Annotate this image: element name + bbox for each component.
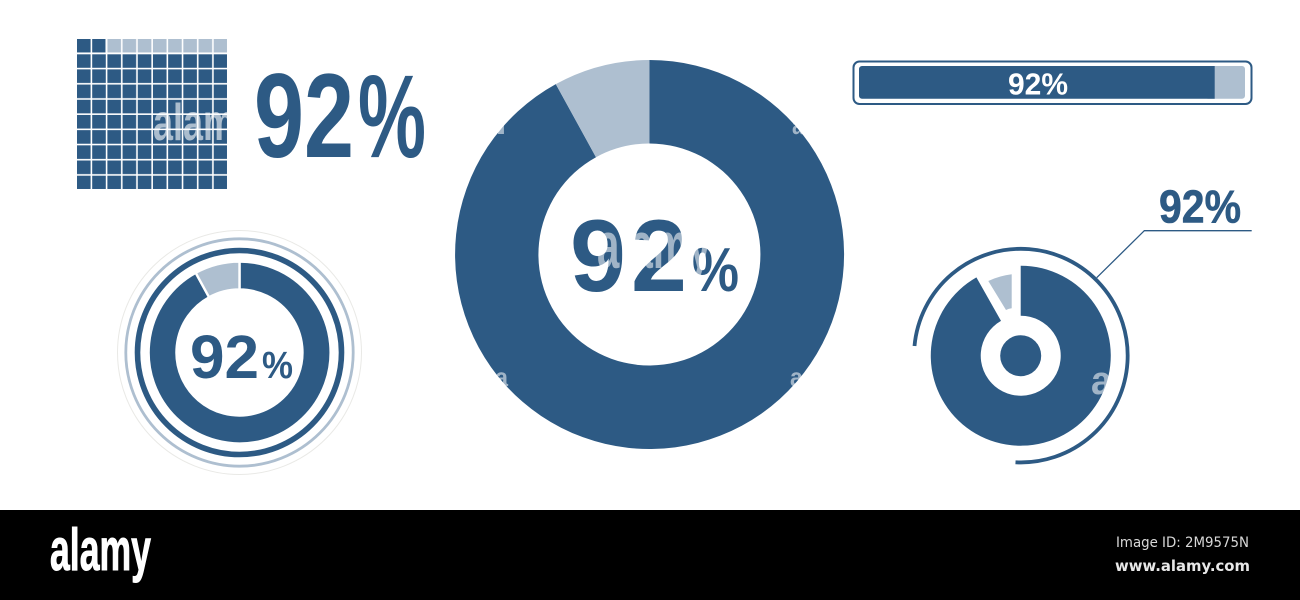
watermark over donut: a	[495, 362, 508, 392]
ringed donut label	[190, 323, 293, 391]
panel: large central donut chart	[455, 60, 844, 449]
watermark over donut: a	[790, 362, 803, 392]
waffle percentage label: %	[358, 51, 426, 183]
donut light segment 8 percent	[556, 60, 650, 157]
panel: ringed donut chart	[118, 230, 362, 474]
outer rings	[118, 230, 362, 474]
panel: waffle chart	[77, 39, 426, 189]
ringed donut dark segment	[149, 261, 331, 443]
alamy logo: alamy	[50, 517, 151, 583]
waffle percentage label: 92	[254, 49, 354, 183]
watermark over donut: l	[495, 110, 507, 140]
bar outline	[854, 62, 1252, 104]
central donut label: 2	[631, 199, 687, 313]
website address: www.alamy.com	[1115, 557, 1250, 575]
waffle grid of 100 squares	[77, 39, 235, 189]
watermark over donut	[495, 110, 804, 392]
central donut label: %	[692, 236, 739, 305]
watermark over donut: a	[792, 110, 804, 140]
central donut label: 9	[570, 199, 626, 313]
bar light remainder	[1205, 66, 1245, 99]
ringed donut light segment	[196, 262, 240, 297]
callout label: 92%	[1159, 180, 1241, 232]
bar dark fill	[859, 66, 1215, 99]
ringed donut label: %	[262, 345, 293, 387]
ringed donut label: 92	[190, 323, 259, 391]
donut dark segment 92 percent	[455, 60, 844, 449]
bar label: 92%	[1008, 66, 1068, 102]
image id: Image ID: 2M9575N	[1116, 535, 1249, 551]
panel: callout donut chart	[914, 180, 1252, 462]
central donut label	[570, 199, 739, 313]
callout donut dark segment	[931, 266, 1111, 446]
waffle grid of 100 squares: alam	[153, 94, 235, 152]
footer band	[0, 510, 1300, 600]
outer arc	[914, 249, 1128, 462]
leader line	[1097, 231, 1252, 278]
callout donut light segment	[988, 274, 1012, 310]
panel: progress bar	[854, 62, 1252, 104]
watermark over donut: alamy	[597, 208, 711, 282]
callout donut center dot	[1000, 335, 1041, 376]
watermark over callout donut: a	[1091, 359, 1113, 403]
